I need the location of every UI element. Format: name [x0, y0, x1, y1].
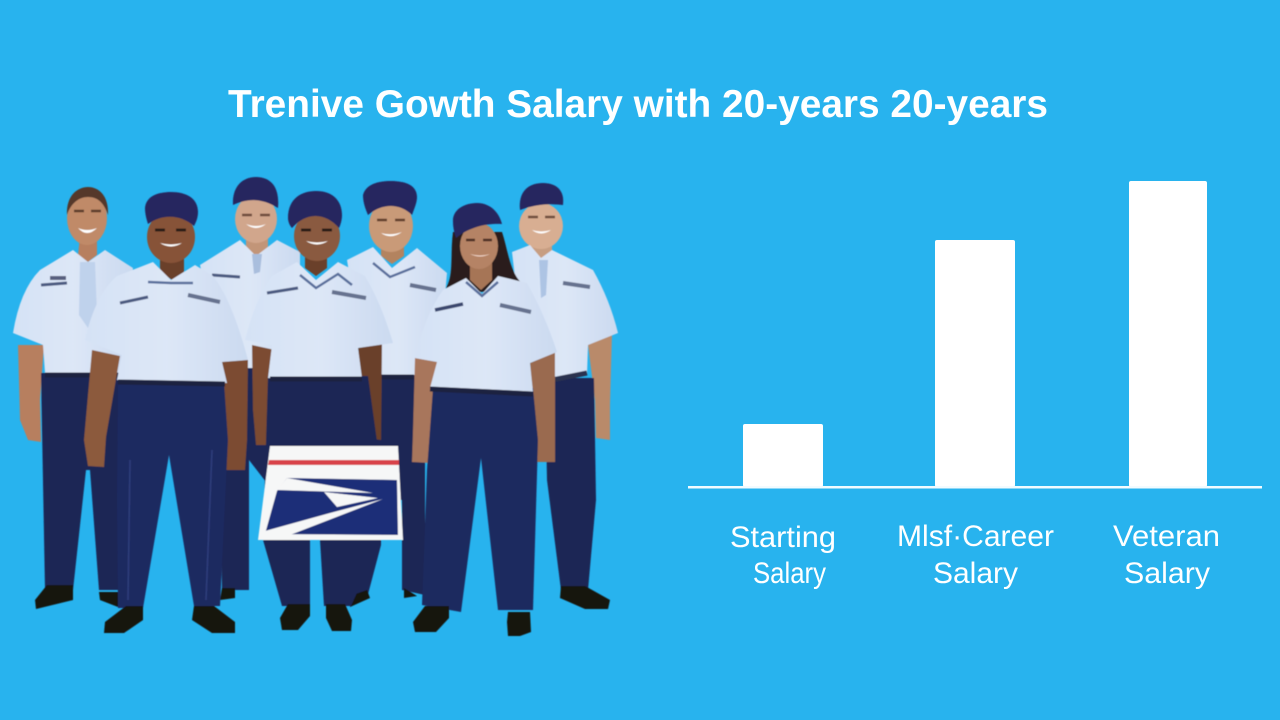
bar: mid-career salary — [935, 240, 1015, 487]
title: Trenive Gowth Salary with 20-years 20-years — [228, 83, 1048, 126]
bar: starting salary — [743, 424, 823, 487]
worker 2: front row — [84, 192, 248, 633]
label: veteran salary — [1113, 520, 1220, 590]
bar chart — [688, 181, 1262, 590]
label: veteran salary: Veteran — [1113, 520, 1220, 553]
label: veteran salary: Salary — [1124, 557, 1210, 590]
label: starting salary: Starting — [730, 521, 836, 554]
label: starting salary — [730, 521, 836, 590]
worker 4: front row — [245, 191, 393, 631]
label: mid-career salary: Mlsf·Career — [897, 520, 1054, 553]
worker 5: back row — [347, 181, 447, 607]
label: mid-career salary: Salary — [933, 557, 1018, 590]
axis line — [688, 486, 1262, 488]
label: starting salary: Salary — [753, 557, 826, 590]
worker 3: back row — [200, 177, 300, 600]
label: mid-career salary — [897, 520, 1054, 590]
group of postal workers photo — [13, 177, 618, 636]
worker 1: back row far left — [13, 187, 133, 609]
USPS style sign with eagle logo — [258, 446, 403, 540]
worker 6: front row with long hair — [412, 203, 557, 636]
bar: veteran salary — [1129, 181, 1207, 487]
worker 7: back row right — [512, 183, 618, 609]
